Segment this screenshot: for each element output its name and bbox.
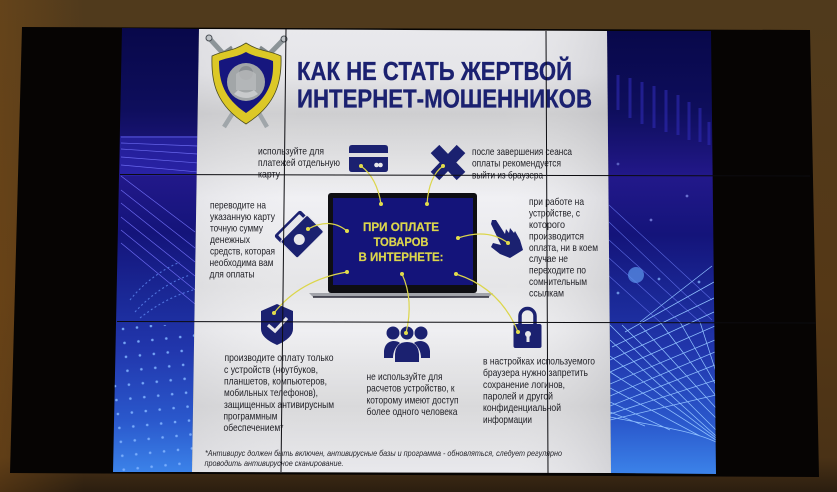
text: protected devices <box>224 353 334 434</box>
text: protected devices: обеспечением* <box>224 422 284 434</box>
laptop heading: ТОВАРОВ <box>374 237 428 249</box>
text: browser settings: информации <box>483 414 532 426</box>
text: protected devices: программным <box>224 412 278 422</box>
title: КАК НЕ СТАТЬ ЖЕРТВОЙ <box>297 56 572 86</box>
text: protected devices: с устройств (ноутбуков, <box>224 364 318 376</box>
title <box>297 56 592 114</box>
icon: group of people <box>384 326 430 362</box>
icon: laptop <box>309 193 493 298</box>
text: shared device: расчетов устройство, к <box>366 384 455 394</box>
text: shared device <box>366 372 458 418</box>
laptop heading: ПРИ ОПЛАТЕ <box>363 222 439 234</box>
text: exact sum: денежных <box>210 235 250 246</box>
yellow connectors <box>272 164 520 335</box>
footnote: проводить антивирусное сканирование. <box>204 459 344 468</box>
text: suspicious links: случае не <box>529 254 568 265</box>
text: exit browser <box>472 147 572 182</box>
text: separate card: используйте для <box>258 146 324 158</box>
text: protected devices: планшетов, компьютеров, <box>224 376 327 388</box>
panel: left blue decoration <box>110 28 202 474</box>
text: exact sum: средств, которая <box>210 246 275 258</box>
laptop heading: В ИНТЕРНЕТЕ: <box>358 252 444 264</box>
footnote: *Антивирус должен быть включен, антивирусные базы и программа - обновляться, следует регулярно <box>205 449 563 458</box>
icon: pointing hand <box>491 220 523 258</box>
text: protected devices: защищенных антивирусным <box>224 400 334 411</box>
text: exit browser: оплаты рекомендуется <box>472 158 561 170</box>
text: suspicious links: ссылкам <box>529 288 564 300</box>
text: shared device: которому имеют доступ <box>366 396 458 406</box>
text: exact sum: переводите на <box>210 200 266 212</box>
text: shared device: не используйте для <box>366 372 442 383</box>
text: suspicious links: которого <box>529 220 565 231</box>
text: suspicious links: устройстве, с <box>529 208 580 220</box>
text: exact sum: для оплаты <box>210 270 254 280</box>
title: ИНТЕРНЕТ-МОШЕННИКОВ <box>297 84 592 114</box>
text: exact sum: указанную карту <box>210 212 276 223</box>
icon: cross <box>435 149 461 176</box>
text: shared device: более одного человека <box>366 406 458 418</box>
panel: right blue decoration <box>605 30 720 476</box>
icon: banknotes <box>275 209 324 259</box>
text: suspicious links: при работе на <box>529 196 584 208</box>
text: suspicious links <box>529 196 598 300</box>
laptop heading <box>358 222 444 264</box>
text: separate card <box>258 146 340 180</box>
text: browser settings: сохранение логинов, <box>483 380 565 391</box>
panel: white infographic background <box>192 29 611 473</box>
text: browser settings: браузера нужно запретить <box>483 367 588 379</box>
text: browser settings <box>483 356 595 426</box>
text: exact sum <box>210 200 276 280</box>
text: suspicious links: оплата, ни в коем <box>529 243 598 254</box>
text: browser settings: паролей и другой <box>483 392 553 402</box>
text: separate card: платежей отдельную <box>258 158 340 169</box>
text: protected devices: мобильных телефонов), <box>224 387 318 399</box>
text: protected devices: производите оплату только <box>224 353 334 364</box>
icon: padlock <box>514 308 542 348</box>
text: suspicious links: сомнительным <box>529 277 587 288</box>
text: browser settings: конфиденциальной <box>483 402 561 414</box>
icon: investigative committee emblem <box>206 35 287 127</box>
icon: bank card <box>349 145 388 172</box>
footnote <box>204 449 563 468</box>
text: exact sum: точную сумму <box>210 224 264 234</box>
text: exit browser: выйти из браузера <box>472 170 543 182</box>
text: browser settings: в настройках используемого <box>483 356 595 368</box>
text: suspicious links: производится <box>529 232 584 242</box>
text: exact sum: необходима вам <box>210 257 274 269</box>
text: suspicious links: переходите по <box>529 266 586 276</box>
icon: shield with check <box>261 304 293 345</box>
text: separate card: карту <box>258 170 281 180</box>
text: exit browser: после завершения сеанса <box>472 147 572 158</box>
